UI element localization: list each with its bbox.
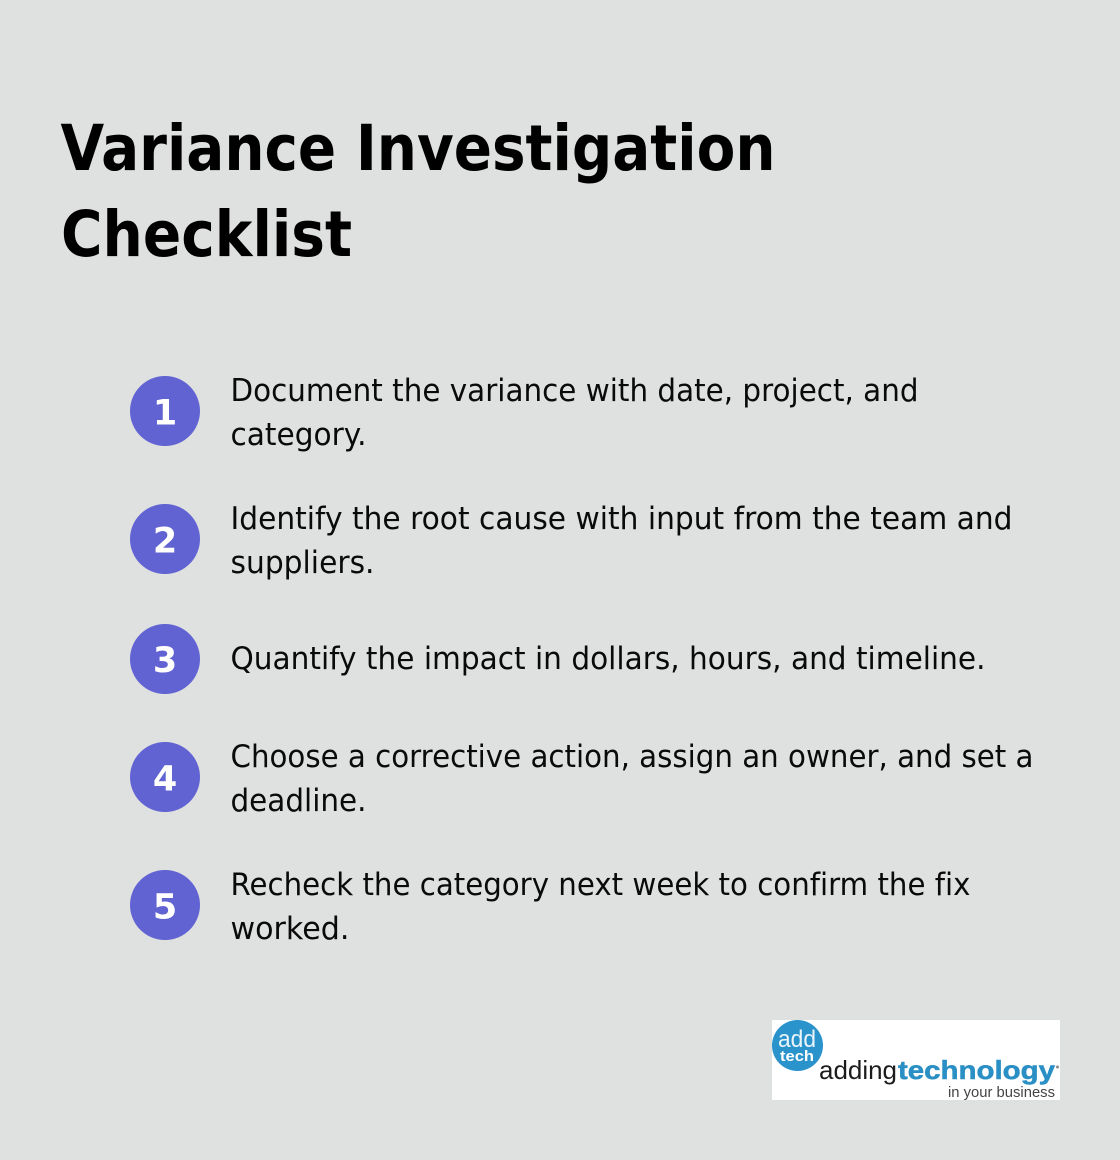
checklist item 4: deadline.: [230, 783, 366, 819]
logo: adding technology: in your business: [948, 1084, 1055, 1101]
checklist item 2: Identify the root cause with input from the team and: [230, 501, 1012, 537]
logo: adding technology: tech: [780, 1048, 814, 1065]
checklist item 1: [130, 373, 918, 453]
logo: adding technology: adding: [819, 1055, 897, 1085]
logo: adding technology: [772, 1020, 1060, 1101]
checklist item 4: 4: [153, 760, 177, 800]
checklist item 5: [130, 867, 970, 947]
checklist item 3: [130, 624, 986, 694]
checklist item 2: [130, 501, 1012, 581]
title: Checklist: [61, 198, 352, 271]
title: [60, 112, 776, 271]
checklist item 3: 3: [153, 641, 177, 681]
title: Variance Investigation: [60, 112, 776, 185]
logo: adding technology: technology: [898, 1055, 1056, 1085]
checklist item 2: 2: [153, 522, 177, 562]
checklist item 1: category.: [230, 417, 366, 453]
checklist item 5: worked.: [230, 911, 350, 947]
checklist item 1: 1: [153, 394, 177, 434]
checklist item 2: suppliers.: [230, 545, 374, 581]
checklist item 4: [130, 739, 1034, 819]
checklist item 4: Choose a corrective action, assign an owner, and set a: [230, 739, 1034, 775]
checklist item 5: 5: [153, 888, 177, 928]
checklist item 3: Quantify the impact in dollars, hours, and timeline.: [230, 641, 986, 677]
logo: adding technology: add: [778, 1026, 816, 1053]
checklist item 5: Recheck the category next week to confirm the fix: [230, 867, 970, 903]
checklist item 1: Document the variance with date, project, and: [230, 373, 918, 409]
